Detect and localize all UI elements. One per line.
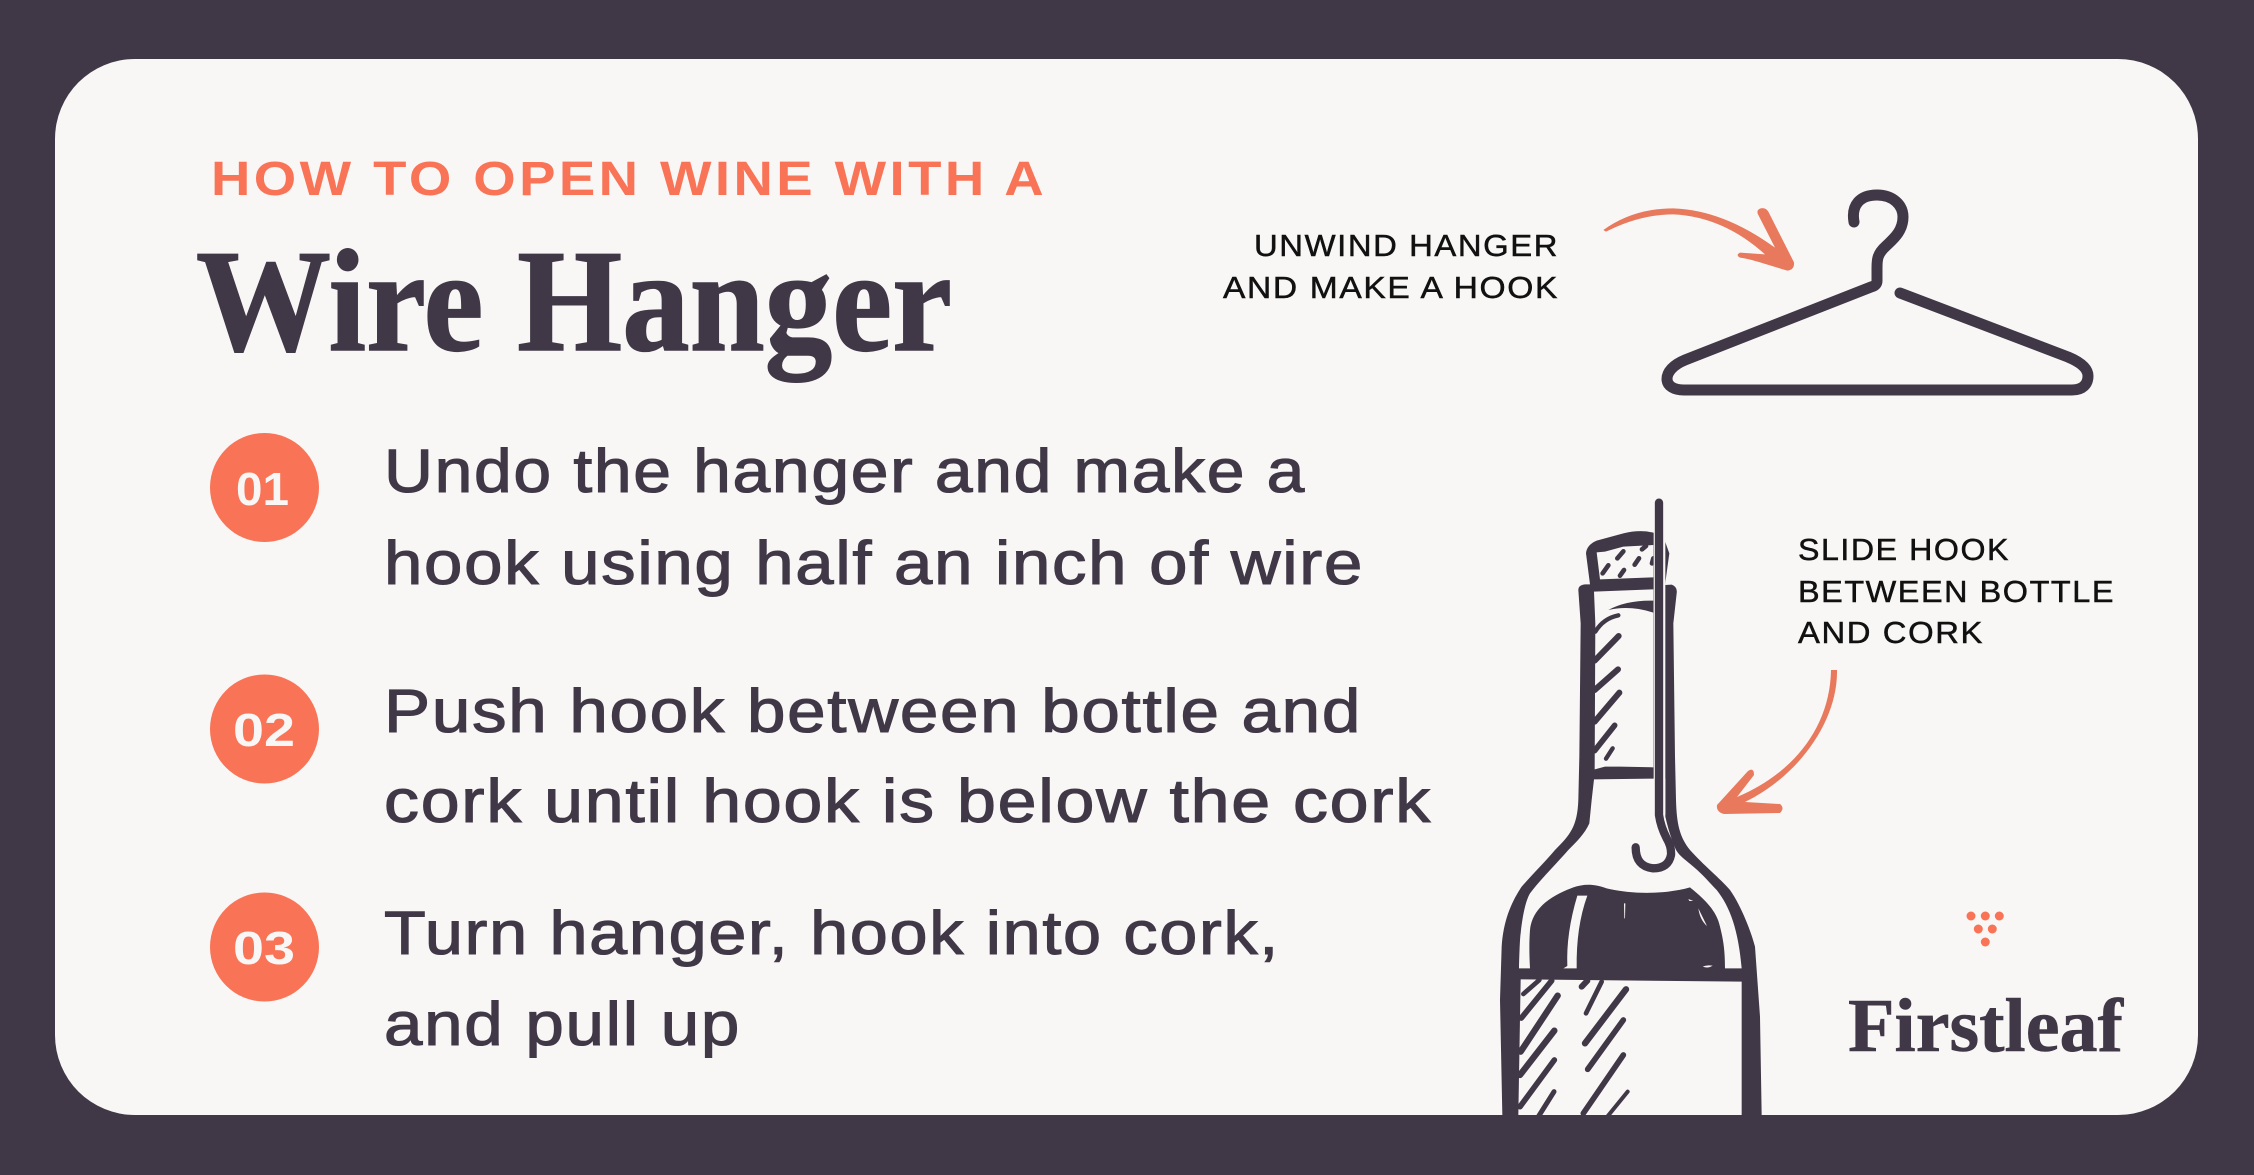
step 01 text: hook using half an inch of wire bbox=[384, 529, 1364, 597]
step 03 text bbox=[384, 899, 1280, 1058]
step 03 text: Turn hanger, hook into cork, bbox=[384, 899, 1280, 967]
heading: eyebrow: HOW TO OPEN WINE WITH A bbox=[211, 153, 1047, 206]
neck bbox=[1594, 589, 1653, 769]
number badge 03: 03 bbox=[233, 922, 295, 974]
callout: slide hook bbox=[1798, 532, 2115, 650]
arrow: to bottle neck bbox=[1717, 670, 1837, 814]
callout: slide hook: BETWEEN BOTTLE bbox=[1798, 574, 2115, 609]
step 02 text: Push hook between bottle and bbox=[384, 677, 1362, 745]
logo: Firstleaf bbox=[1848, 912, 2125, 1068]
number badge 02 bbox=[210, 674, 319, 784]
number badge 01: 01 bbox=[236, 463, 289, 515]
step 01 text bbox=[384, 437, 1364, 597]
icon: wine bottle with hanger wire bbox=[1500, 503, 1762, 1117]
step 03 bbox=[210, 892, 1280, 1058]
hanger wire bbox=[1636, 503, 1671, 868]
bottle silhouette bbox=[1500, 531, 1762, 1115]
shoulder glass bbox=[1519, 779, 1742, 968]
number badge 02: 02 bbox=[233, 704, 295, 756]
step 02 text bbox=[384, 677, 1432, 835]
title: Wire Hanger bbox=[196, 220, 952, 382]
step 02 bbox=[210, 674, 1432, 835]
step 02 text: cork until hook is below the cork bbox=[384, 767, 1432, 835]
cork bbox=[1597, 545, 1653, 579]
step 03 text: and pull up bbox=[384, 990, 741, 1058]
callout: unwind hanger: AND MAKE A HOOK bbox=[1223, 270, 1559, 305]
arrow: to hanger bbox=[1603, 208, 1794, 271]
icon: wire hanger bbox=[1667, 195, 2088, 390]
wordmark: Firstleaf bbox=[1848, 984, 2125, 1068]
step 01 text: Undo the hanger and make a bbox=[384, 437, 1306, 505]
icon: grape dots bbox=[1966, 912, 2004, 946]
callout: slide hook: SLIDE HOOK bbox=[1798, 532, 2010, 567]
number badge 01 bbox=[210, 433, 319, 542]
wine highlights bbox=[1563, 896, 1713, 968]
lower glass with hatching bbox=[1518, 979, 1742, 1117]
callout: unwind hanger: UNWIND HANGER bbox=[1254, 228, 1559, 263]
step 01 bbox=[210, 433, 1364, 597]
callout: unwind hanger bbox=[1223, 228, 1559, 305]
callout: slide hook: AND CORK bbox=[1798, 615, 1984, 650]
number badge 03 bbox=[210, 892, 319, 1002]
